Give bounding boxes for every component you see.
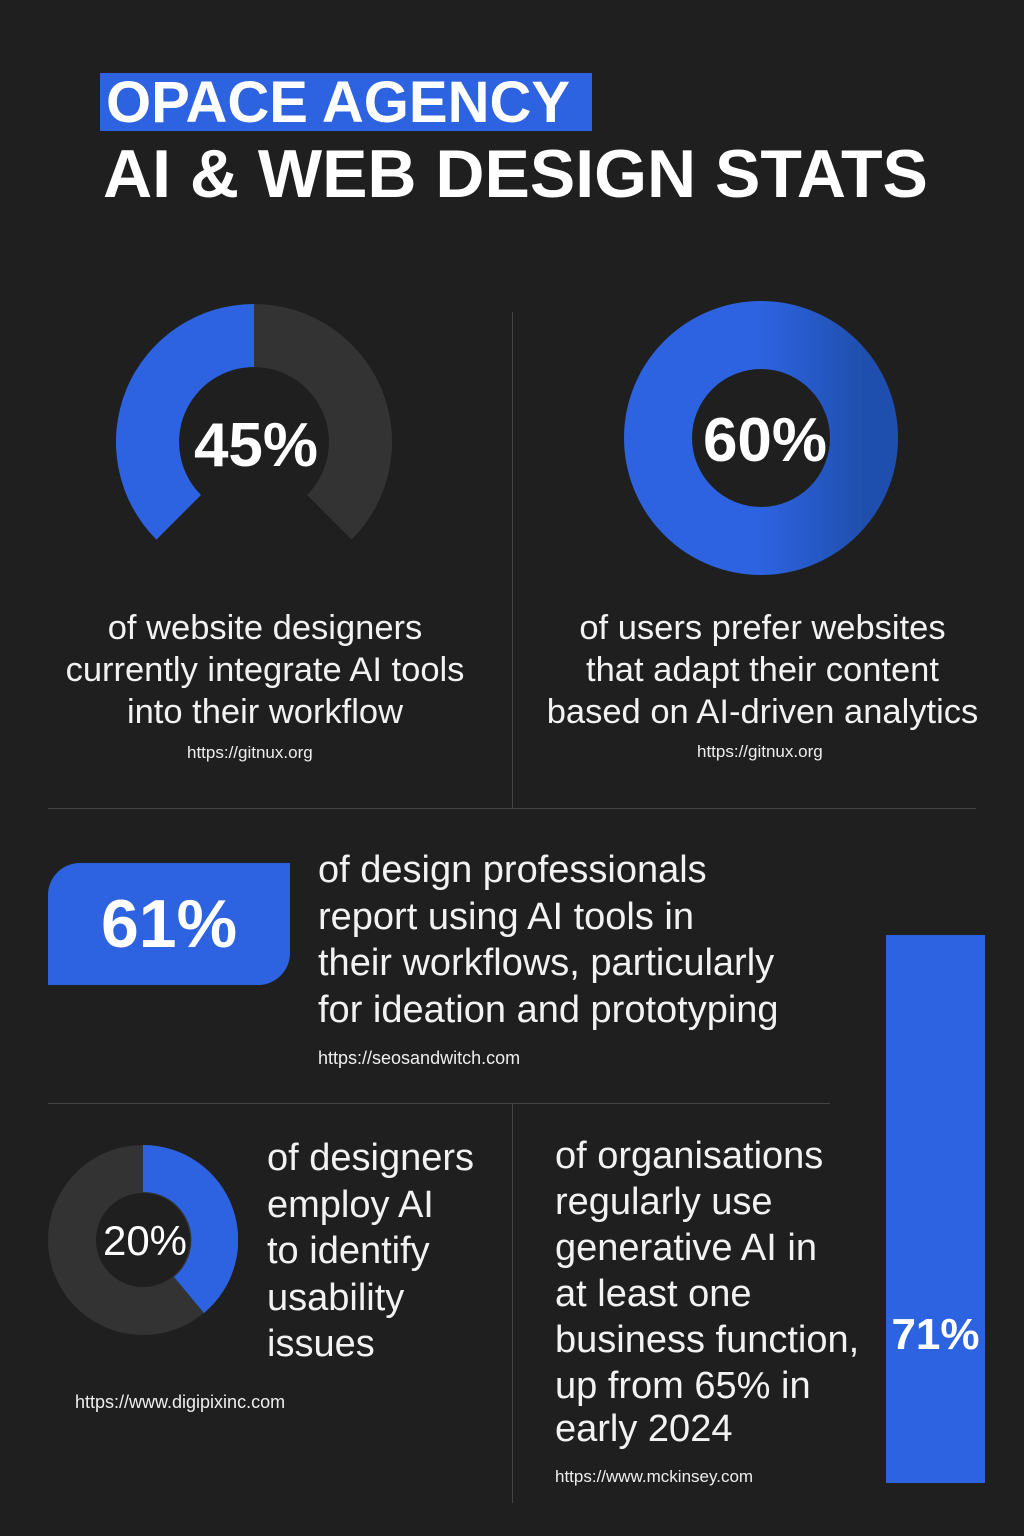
text: of designers xyxy=(267,1137,474,1179)
text: 71% stat: business function, xyxy=(555,1319,859,1361)
source: https://gitnux.org xyxy=(697,742,823,761)
text: employ AI xyxy=(267,1184,434,1226)
title highlight: OPACE AGENCY: OPACE AGENCY xyxy=(106,70,570,135)
caption: of website designers xyxy=(108,609,422,647)
caption: that adapt their content xyxy=(586,651,939,689)
donut chart 20%: 20% xyxy=(103,1217,187,1264)
caption: based on AI-driven analytics xyxy=(547,693,978,731)
donut chart 45% xyxy=(116,304,392,540)
text: 71% stat: regularly use xyxy=(555,1181,773,1223)
text: to identify xyxy=(267,1230,430,1272)
text: 71% stat: of organisations xyxy=(555,1135,823,1177)
source: seosandwitch: https://seosandwitch.com xyxy=(318,1048,520,1068)
bar: 71%: 71% xyxy=(891,1310,980,1359)
divider lines xyxy=(512,312,513,808)
text: 61% stat xyxy=(318,849,779,1030)
text: issues xyxy=(267,1323,375,1365)
source: mckinsey: https://www.mckinsey.com xyxy=(555,1467,753,1486)
badge: 61%: 61% xyxy=(101,886,237,962)
donut chart 20% xyxy=(48,1145,238,1335)
bar: 71% xyxy=(886,935,985,1483)
panel: 20% xyxy=(48,1137,474,1412)
text: 71% stat: at least one xyxy=(555,1273,751,1315)
text: 61% stat: of design professionals xyxy=(318,849,707,891)
panel: 45% xyxy=(66,304,464,762)
caption: of users prefer websites xyxy=(579,609,946,647)
text: 71% stat xyxy=(555,1135,859,1450)
text xyxy=(267,1137,474,1365)
caption xyxy=(547,609,978,731)
text: 61% stat: for ideation and prototyping xyxy=(318,988,779,1030)
text: 71% stat: up from 65% in xyxy=(555,1365,811,1407)
caption xyxy=(66,609,464,731)
donut chart 60% xyxy=(624,301,898,575)
badge: 61% xyxy=(48,863,290,985)
caption: into their workflow xyxy=(127,693,403,731)
text: 71% stat: generative AI in xyxy=(555,1227,817,1269)
donut chart 60%: 60% xyxy=(703,406,827,475)
text: 71% stat: early 2024 xyxy=(555,1408,732,1450)
title: AI & WEB DESIGN STATS: AI & WEB DESIGN STATS xyxy=(103,136,928,212)
text: usability xyxy=(267,1276,404,1318)
donut chart 45%: 45% xyxy=(194,411,318,480)
caption: currently integrate AI tools xyxy=(66,651,464,689)
text: 61% stat: report using AI tools in xyxy=(318,896,694,938)
panel: 60% xyxy=(547,301,978,761)
text: 61% stat: their workflows, particularly xyxy=(318,942,774,984)
source: https://gitnux.org xyxy=(187,743,313,762)
source: https://www.digipixinc.com xyxy=(75,1392,285,1412)
